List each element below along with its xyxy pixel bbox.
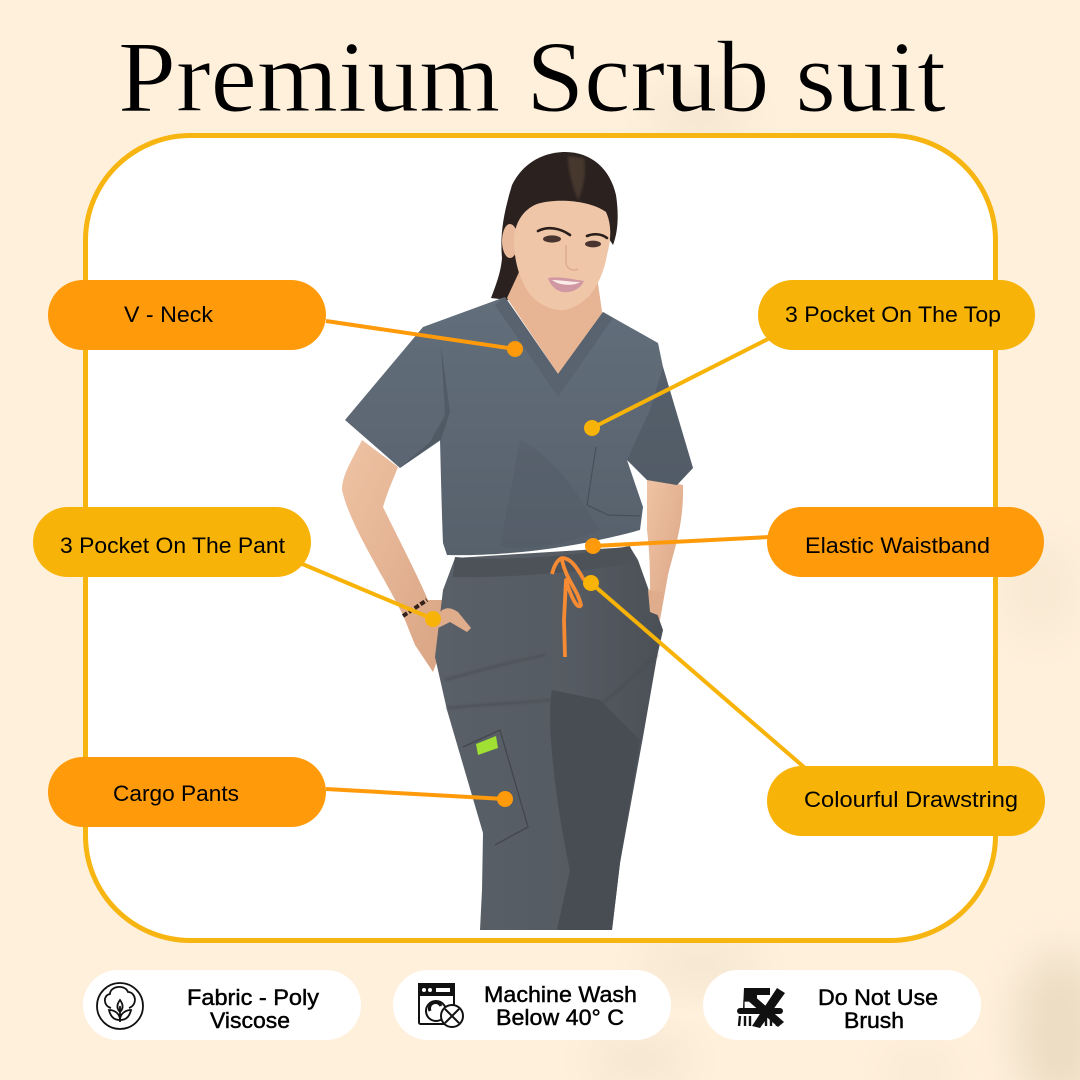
neck	[507, 270, 603, 374]
figure: model wearing scrub suit	[342, 152, 693, 930]
text: fabric: Viscose	[210, 1008, 290, 1033]
care badge: fabric	[83, 970, 361, 1040]
fingers in left pocket	[438, 608, 471, 632]
callout: Elastic Waistband	[585, 507, 1044, 577]
panel: product photo frame	[86, 136, 996, 940]
text: machine wash: Machine Wash	[484, 982, 637, 1007]
callout: V - Neck: V - Neck	[124, 302, 214, 327]
text: fabric: Fabric - Poly	[187, 985, 319, 1010]
hair	[491, 152, 618, 300]
brand tag	[476, 736, 498, 755]
callout: 3 Pocket On The Top	[584, 280, 1035, 436]
text: no brush: Brush	[844, 1008, 904, 1033]
bracelet	[403, 600, 427, 616]
care badge: machine wash	[393, 970, 671, 1040]
pants	[435, 547, 663, 930]
facial features	[538, 228, 607, 292]
callout: Cargo Pants	[48, 757, 513, 827]
icon: washing machine with cross	[419, 984, 463, 1027]
callout: Colourful Drawstring: Colourful Drawstring	[804, 787, 1018, 812]
drawstring	[552, 558, 584, 657]
ear	[502, 224, 518, 258]
callout: 3 Pocket On The Pant: 3 Pocket On The Pant	[60, 533, 285, 558]
callout: Elastic Waistband: Elastic Waistband	[805, 533, 990, 558]
icon: cotton flower	[97, 983, 143, 1029]
shirt pocket seam	[587, 447, 640, 516]
care badge: no brush	[703, 970, 981, 1040]
left arm	[342, 440, 445, 672]
cargo pocket	[463, 730, 528, 845]
callout: Cargo Pants: Cargo Pants	[113, 781, 239, 806]
icon: crossed-out brush	[737, 988, 785, 1028]
shirt collar	[495, 297, 613, 397]
inner leg shadow	[550, 690, 640, 930]
waistband	[453, 546, 635, 577]
callout: 3 Pocket On The Top: 3 Pocket On The Top	[785, 302, 1001, 327]
right arm	[647, 478, 683, 620]
title: Premium Scrub suit	[118, 21, 946, 134]
callout: V - Neck	[48, 280, 523, 357]
hair part highlight	[568, 156, 585, 200]
text: no brush: Do Not Use	[818, 985, 938, 1010]
face	[514, 201, 610, 310]
sleeve shadows	[400, 345, 693, 548]
shirt	[345, 297, 693, 555]
callout: 3 Pocket On The Pant	[33, 507, 441, 627]
callout: Colourful Drawstring	[583, 575, 1045, 836]
pant folds	[445, 655, 657, 708]
fingers in right pocket	[648, 590, 663, 616]
text: machine wash: Below 40° C	[496, 1005, 624, 1030]
